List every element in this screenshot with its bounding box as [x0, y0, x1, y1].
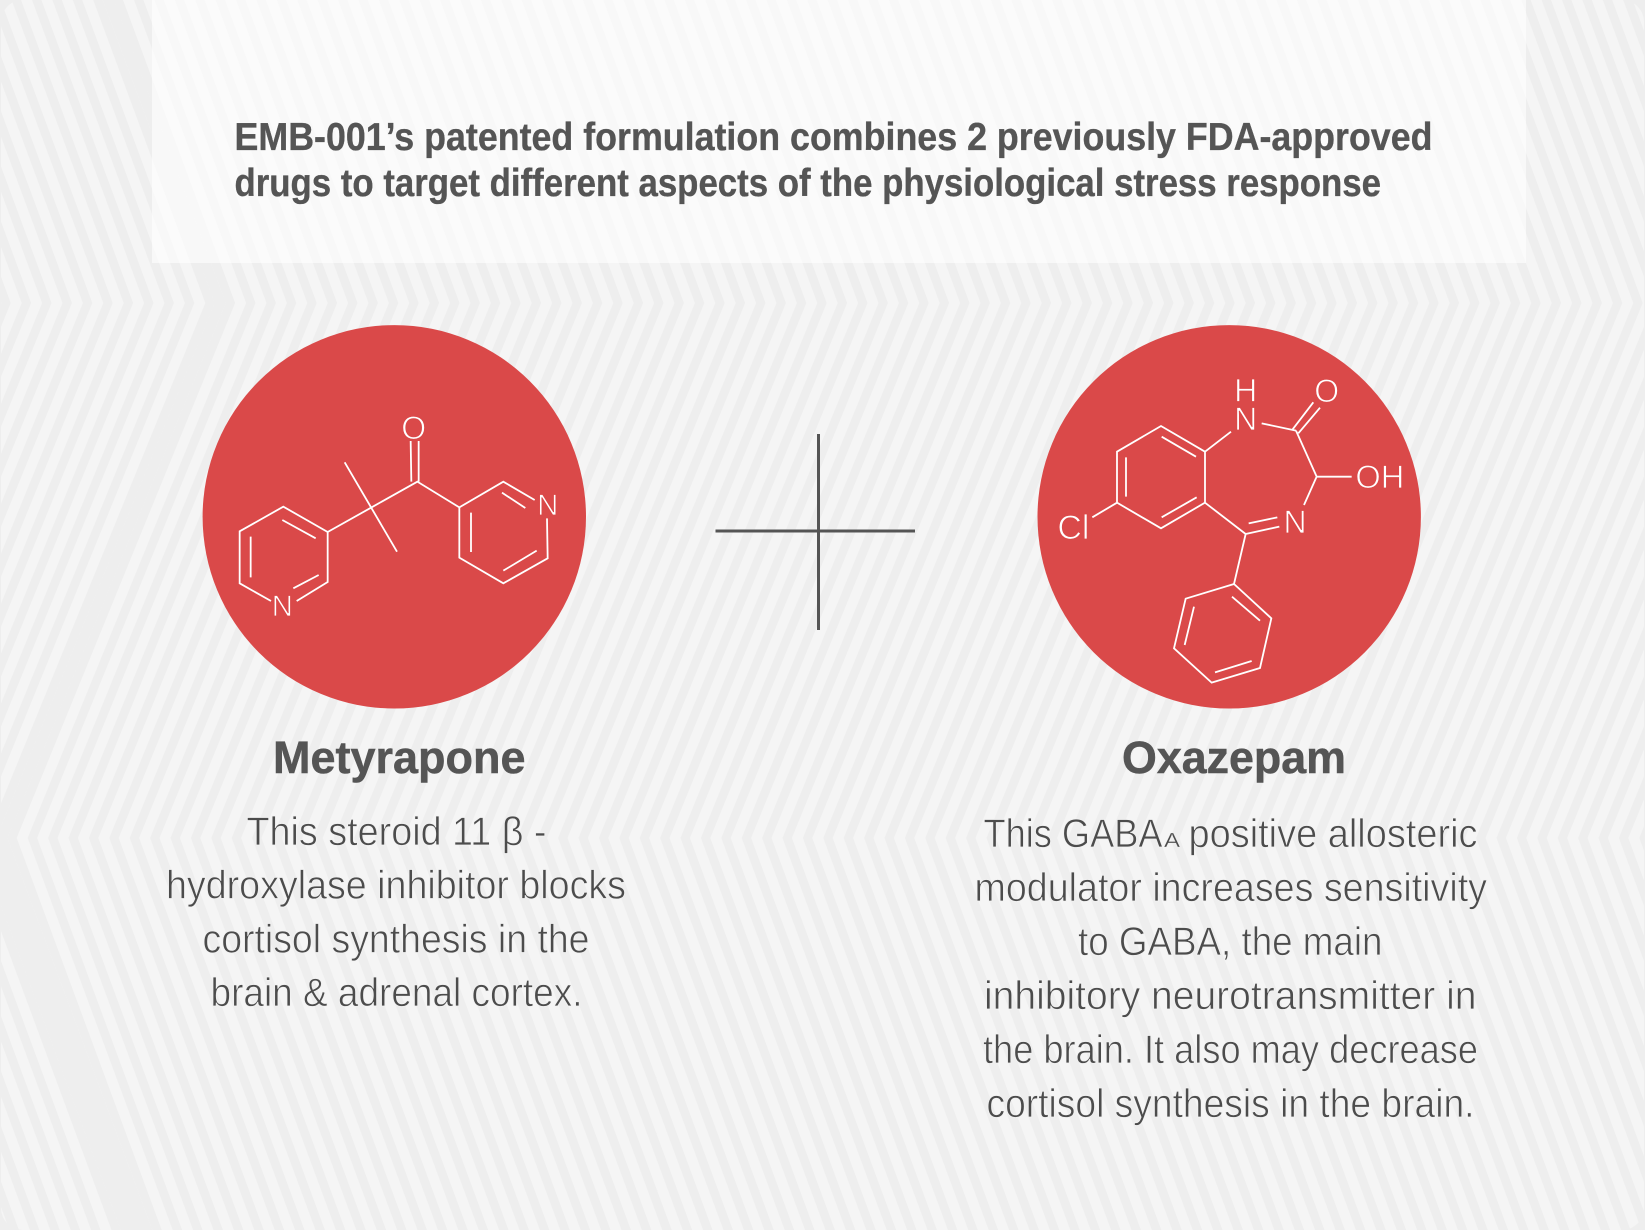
icon: oxazepam molecule: OH — [1355, 458, 1404, 495]
text block: Oxazepam description: to GABA, the main — [1078, 920, 1382, 964]
text block: Oxazepam description: positive allosteric — [1188, 812, 1478, 856]
heading line 1: EMB-001’s patented formulation combines 2 previously FDA-approved — [234, 116, 1432, 159]
icon: metyrapone molecule — [240, 410, 558, 623]
icon: oxazepam molecule: H — [1234, 372, 1257, 408]
panel: oxazepam circle with molecule — [1038, 325, 1421, 708]
icon: metyrapone molecule: N — [537, 489, 558, 522]
text block: Oxazepam description: modulator increases sensitivity — [974, 866, 1487, 910]
text block: Metyrapone description: cortisol synthesis in the — [202, 917, 590, 961]
icon: oxazepam molecule — [1057, 372, 1404, 683]
icon: plus sign — [716, 434, 915, 630]
panel: metyrapone circle with molecule — [203, 325, 586, 708]
icon: oxazepam molecule: N — [1234, 401, 1257, 437]
icon: oxazepam molecule: O — [1314, 373, 1339, 409]
text block: Metyrapone description: This steroid 11 β - — [246, 810, 546, 854]
text block: Metyrapone description: brain & adrenal cortex. — [210, 971, 582, 1015]
drug name: Oxazepam: Oxazepam — [1122, 732, 1346, 783]
icon: metyrapone molecule: N — [272, 590, 293, 623]
text block: Metyrapone description — [166, 810, 626, 1015]
text block: Oxazepam description: This GABA — [984, 812, 1163, 856]
icon: oxazepam molecule: Cl — [1057, 509, 1089, 547]
text block: Oxazepam description — [974, 812, 1487, 1126]
text block: Oxazepam description: inhibitory neurotransmitter in — [984, 974, 1476, 1018]
drug name: Metyrapone: Metyrapone — [273, 732, 526, 783]
text block: Oxazepam description: the brain. It also may decrease — [983, 1028, 1478, 1072]
heading line 2: drugs to target different aspects of the physiological stress response — [234, 162, 1381, 205]
text block: Metyrapone description: hydroxylase inhibitor blocks — [166, 863, 626, 907]
icon: oxazepam molecule: N — [1283, 504, 1307, 540]
header panel — [152, 0, 1526, 263]
text block: Oxazepam description: cortisol synthesis in the brain. — [986, 1082, 1474, 1126]
text block: Oxazepam description: A — [1164, 830, 1181, 852]
icon: metyrapone molecule: O — [401, 410, 426, 446]
